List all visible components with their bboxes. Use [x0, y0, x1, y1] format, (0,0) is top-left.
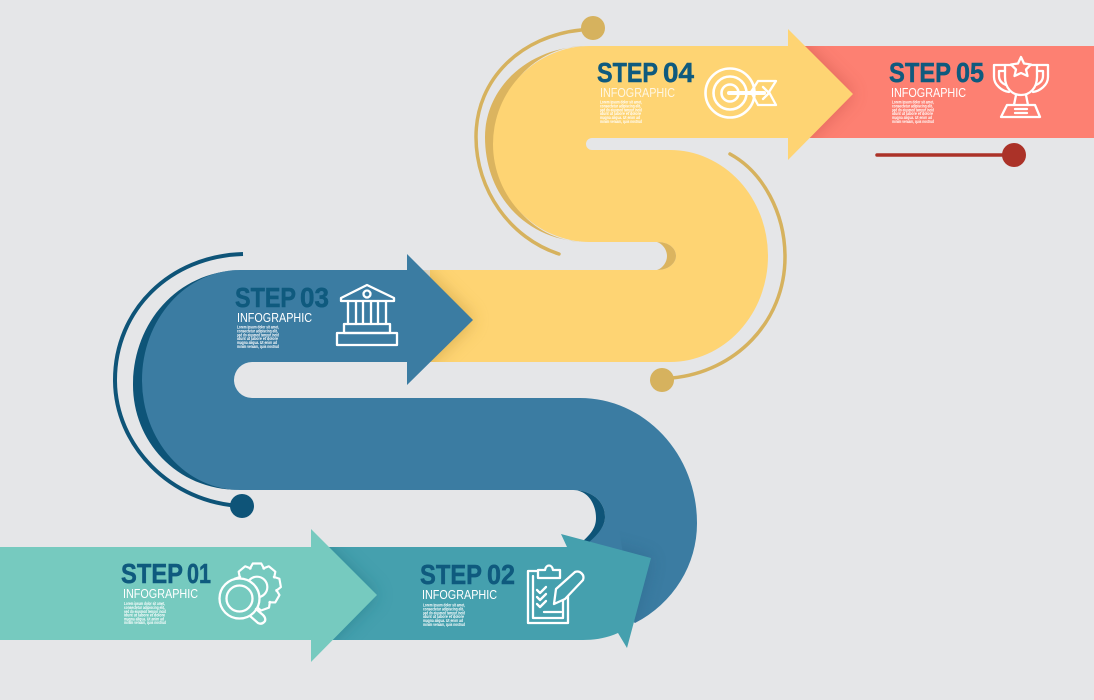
step 3 text: INFOGRAPHIC: [237, 311, 312, 325]
gold arc right: [672, 154, 785, 378]
step 5 text: consectetur adipiscing elit,: [892, 104, 933, 108]
step 2 text: consectetur adipiscing elit,: [423, 606, 464, 612]
step 4 text: Lorem ipsum dolor sit amet,: [600, 100, 642, 104]
step 1 text: INFOGRAPHIC: [123, 587, 198, 601]
step 3 text: magna aliqua. Ut enim ad: [237, 340, 277, 345]
step 4 text: [597, 57, 695, 124]
step 1 text: 01: [187, 558, 211, 589]
step 3 text: idunt ut labore et dolore: [237, 336, 279, 341]
step 2 text: sed do eiusmod tempor incid: [423, 610, 465, 616]
step 2 text: STEP: [420, 559, 482, 590]
navy dot: [230, 494, 254, 518]
step 5 text: idunt ut labore et dolore: [892, 111, 934, 116]
step 1 text: Lorem ipsum dolor sit amet,: [124, 601, 165, 606]
gold arc upper left: [476, 30, 581, 254]
step 5 text: STEP: [889, 57, 951, 88]
step 5 band: [805, 46, 1094, 138]
step 5 text: [889, 57, 984, 124]
red dot: [1002, 143, 1026, 167]
step 2 text: [420, 559, 515, 627]
icon: bank building: [337, 285, 397, 345]
step 3 text: sed do eiusmod tempor incid: [237, 332, 279, 338]
step 5 text: magna aliqua. Ut enim ad: [892, 115, 932, 120]
step 2 head shadow on blue: [561, 534, 651, 648]
step 1 text: sed do eiusmod tempor incid: [124, 609, 166, 614]
yellow outer crescent: [485, 46, 585, 242]
step 2 text: INFOGRAPHIC: [422, 588, 497, 602]
step 1 text: consectetur adipiscing elit,: [124, 605, 165, 610]
dark blue left crescent: [133, 270, 240, 490]
navy arc: [115, 254, 243, 506]
step 2 text: magna aliqua. Ut enim ad: [423, 618, 463, 623]
yellow notch crescent: [657, 242, 676, 270]
step 1 arrow: [0, 529, 377, 662]
step 4 text: magna aliqua. Ut enim ad: [600, 115, 640, 120]
step 4 text: INFOGRAPHIC: [600, 86, 675, 100]
step 5 text: Lorem ipsum dolor sit amet,: [892, 100, 934, 104]
step 5 text: 05: [956, 57, 984, 88]
step 1 text: [121, 558, 211, 625]
step 5 text: INFOGRAPHIC: [891, 86, 966, 100]
icon: clipboard and pen: [528, 566, 583, 623]
step 3 text: [235, 282, 329, 349]
step 5 text: minim veniam, quis nostrud: [892, 119, 934, 124]
step 5 text: sed do eiusmod tempor incid: [892, 108, 934, 112]
step 1 text: minim veniam, quis nostrud: [124, 620, 166, 625]
step 2 text: Lorem ipsum dolor sit amet,: [423, 602, 465, 608]
icon: trophy: [994, 57, 1048, 117]
step 4 text: idunt ut labore et dolore: [600, 111, 642, 116]
step 3 text: Lorem ipsum dolor sit amet,: [237, 324, 279, 330]
step 4 text: sed do eiusmod tempor incid: [600, 108, 642, 112]
icon: gear and magnifier: [220, 564, 281, 624]
step 1 head shadow: [330, 547, 375, 640]
step 3 head shadow on yellow: [423, 270, 475, 362]
gold dot bottom: [650, 368, 674, 392]
step 4 text: STEP: [597, 57, 658, 88]
step 4 text: minim veniam, quis nostrud: [600, 119, 642, 124]
step 1 text: idunt ut labore et dolore: [124, 612, 166, 618]
step 2 arrow: [320, 534, 651, 648]
step 3 text: STEP: [235, 282, 296, 313]
step 2 text: 02: [487, 559, 515, 590]
step 4 yellow ribbon and arrow: [430, 29, 853, 362]
step 4 text: 04: [663, 57, 695, 88]
step 3 text: 03: [300, 282, 329, 313]
step 3 text: consectetur adipiscing elit,: [237, 328, 278, 334]
step 1 text: STEP: [121, 558, 183, 589]
icon: target with arrow: [706, 68, 776, 118]
step 3 text: minim veniam, quis nostrud: [237, 344, 279, 349]
red line: [877, 153, 1010, 157]
gold dot top: [581, 16, 605, 40]
step 4 text: consectetur adipiscing elit,: [600, 104, 641, 108]
step 2 text: idunt ut labore et dolore: [423, 614, 465, 619]
step 3 blue ribbon and arrow: [142, 254, 697, 623]
step 1 text: magna aliqua. Ut enim ad: [124, 616, 164, 622]
step 2 text: minim veniam, quis nostrud: [423, 622, 465, 627]
dark blue notch crescent: [573, 490, 605, 543]
